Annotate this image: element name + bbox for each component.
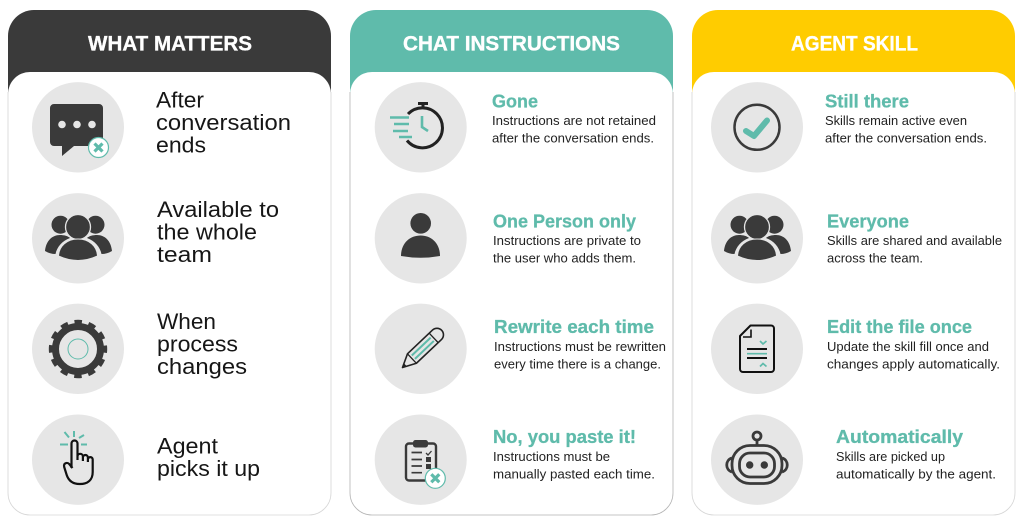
- text: when process changes: changes: [157, 354, 247, 379]
- header: agent skill: [692, 10, 1015, 95]
- text: when process changes: process: [157, 332, 238, 356]
- text: after conversation ends: ends: [156, 132, 206, 158]
- text: one person only: the user who adds them.: [493, 252, 636, 266]
- header: agent skill: AGENT SKILL: [791, 32, 918, 56]
- row: rewrite each time: [375, 304, 666, 394]
- icon: team: [32, 193, 124, 284]
- row: still there: [711, 82, 987, 172]
- card body: [692, 72, 1015, 515]
- header: what matters: [8, 10, 331, 95]
- row: gone: [375, 82, 656, 172]
- text: everyone: Everyone: [827, 210, 909, 232]
- row: one person only: [375, 193, 641, 284]
- text: no, you paste it: No, you paste it!: [493, 426, 636, 447]
- icon: pencil: [375, 304, 467, 394]
- icon: team: [711, 193, 803, 284]
- text: rewrite each time: Instructions must be rewritten: [494, 340, 666, 354]
- text: available to the whole team: the whole: [157, 220, 257, 244]
- card body: [8, 72, 331, 515]
- text: when process changes: [157, 309, 247, 379]
- text: rewrite each time: every time there is a change.: [494, 358, 661, 372]
- text: edit the file once: Update the skill fill once and: [827, 340, 989, 354]
- header: chat instructions: CHAT INSTRUCTIONS: [403, 32, 620, 56]
- row: after conversation ends: [32, 82, 291, 172]
- text: edit the file once: Edit the file once: [827, 316, 972, 337]
- text: edit the file once: changes apply automatically.: [827, 358, 1000, 372]
- row: agent picks it up: [32, 414, 260, 505]
- text: after conversation ends: After: [156, 88, 204, 112]
- text: still there: after the conversation ends.: [825, 132, 987, 146]
- panel: chat instructions: [350, 10, 673, 515]
- icon: robot: [711, 414, 803, 505]
- text: automatically: automatically by the agent.: [836, 468, 996, 482]
- text: available to the whole team: [157, 197, 279, 267]
- text: automatically: [836, 426, 996, 482]
- panel: what matters: [8, 10, 331, 515]
- icon: stopwatch: [375, 82, 467, 172]
- text: agent picks it up: picks it up: [157, 456, 260, 481]
- icon: check mark: [711, 82, 803, 172]
- row: when process changes: [32, 304, 247, 394]
- panel: agent skill: [692, 10, 1015, 515]
- text: everyone: Skills are shared and available: [827, 234, 1002, 248]
- text: rewrite each time: Rewrite each time: [494, 316, 654, 337]
- text: still there: [825, 90, 987, 146]
- icon: tapping hand: [32, 414, 124, 505]
- icon: person: [375, 193, 467, 284]
- text: no, you paste it: manually pasted each time.: [493, 468, 655, 482]
- row: no, you paste it: [375, 414, 655, 505]
- text: everyone: across the team.: [827, 252, 923, 266]
- icon: document: [711, 304, 803, 394]
- text: available to the whole team: team: [157, 242, 212, 267]
- text: rewrite each time: [494, 316, 666, 372]
- text: everyone: [827, 210, 1002, 266]
- text: no, you paste it: Instructions must be: [493, 450, 610, 464]
- row: everyone: [711, 193, 1002, 284]
- text: automatically: Automatically: [836, 426, 964, 447]
- row: edit the file once: [711, 304, 1000, 394]
- text: gone: after the conversation ends.: [492, 132, 654, 146]
- text: after conversation ends: conversation: [156, 110, 291, 135]
- header: what matters: WHAT MATTERS: [88, 32, 252, 56]
- header: chat instructions: [350, 10, 673, 95]
- text: one person only: One Person only: [493, 210, 637, 232]
- text: gone: Gone: [492, 90, 538, 112]
- row: available to the whole team: [32, 193, 279, 284]
- text: no, you paste it: [493, 426, 655, 482]
- text: gone: [492, 90, 656, 146]
- text: after conversation ends: [156, 88, 291, 158]
- text: still there: Skills remain active even: [825, 114, 967, 128]
- card body: [350, 72, 673, 515]
- row: automatically: [711, 414, 996, 505]
- text: edit the file once: [827, 316, 1000, 372]
- text: when process changes: When: [157, 309, 216, 334]
- text: still there: Still there: [825, 90, 909, 112]
- text: available to the whole team: Available to: [157, 197, 279, 222]
- text: automatically: Skills are picked up: [836, 450, 945, 464]
- icon: clipboard with x badge: [375, 414, 467, 505]
- text: agent picks it up: Agent: [157, 434, 218, 458]
- icon: chat bubble with x badge: [32, 82, 124, 172]
- text: agent picks it up: [157, 434, 260, 481]
- text: gone: Instructions are not retained: [492, 114, 656, 128]
- text: one person only: [493, 210, 641, 266]
- icon: gear: [32, 304, 124, 394]
- text: one person only: Instructions are private to: [493, 234, 641, 248]
